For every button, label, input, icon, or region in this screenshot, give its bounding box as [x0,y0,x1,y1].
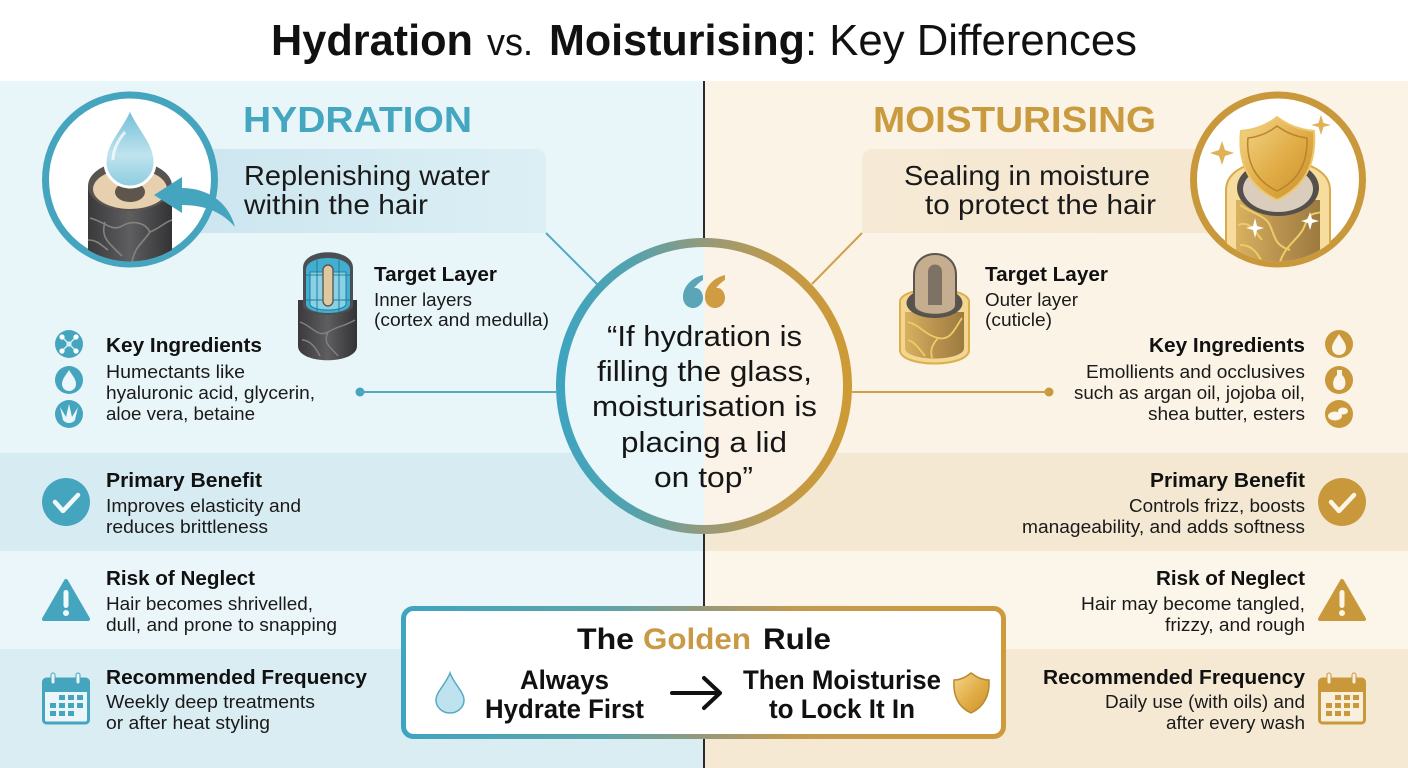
text: risk of neglect: Risk of Neglect [106,568,255,590]
text: primary benefit: reduces brittleness [106,516,268,537]
heading: the golden rule: The [577,623,634,656]
connector: ingredients to quote [852,388,1054,396]
text: key ingredients [1074,335,1305,424]
golden rule box [404,608,1004,736]
text: key ingredients: such as argan oil, jojoba oil, [1074,382,1305,403]
text: key ingredients: Key Ingredients [1149,335,1305,357]
heading: hydration: HYDRATION [243,99,472,140]
icon: oil bottle [1325,366,1353,394]
text: quote: on top” [654,462,753,494]
heading: the golden rule: Golden [643,623,751,656]
quote circle [560,242,848,530]
connector: callout to quote [546,233,597,284]
icon: calendar [1319,673,1365,723]
text: risk of neglect: Hair may become tangled, [1081,593,1305,614]
text: quote [592,321,817,494]
header background [0,0,1408,81]
text: quote: moisturisation is [592,391,817,423]
icon: water drop entering hair [46,95,235,270]
icon: target layer outer [900,254,969,364]
text: target layer: Target Layer [985,264,1108,286]
text: then moisturise: Then Moisturise [743,665,941,695]
text: risk of neglect: frizzy, and rough [1165,614,1305,635]
icon: warning [1320,581,1364,619]
icon: shield over hair [1194,95,1362,270]
text: risk of neglect [106,568,337,635]
callout: hydration definition: Replenishing water [244,160,490,191]
text: key ingredients: aloe vera, betaine [106,403,255,424]
icon: oil drop [1325,330,1353,358]
text: target layer [985,264,1108,330]
text: always hydrate first [485,665,644,724]
text: target layer: Inner layers [374,289,472,310]
icon: target layer inner [298,252,357,360]
heading: moisturising: MOISTURISING [873,99,1156,140]
text: always hydrate first: Always [520,665,609,695]
heading: the golden rule [577,623,831,656]
icon: small drop [436,673,464,713]
text: recommended frequency [106,667,368,733]
text: quote: “If hydration is [607,321,802,353]
text: recommended frequency: Recommended Frequency [106,667,368,689]
text: primary benefit: Controls frizz, boosts [1129,495,1305,516]
text: then moisturise: to Lock It In [769,694,915,724]
text: quote: placing a lid [621,427,787,459]
text: quote: filling the glass, [597,356,812,388]
text: then moisturise [743,665,941,724]
icon: ingredient aloe [55,400,83,428]
text: always hydrate first: Hydrate First [485,694,644,724]
title: : Key Differences [805,16,1137,65]
text: key ingredients: Key Ingredients [106,335,262,357]
connector: callout to quote [812,233,862,284]
callout: moisturising definition [862,149,1210,233]
icon: ingredient drop [55,366,83,394]
text: recommended frequency [1043,667,1306,733]
center divider [703,81,705,768]
text: target layer: (cuticle) [985,309,1052,330]
callout: moisturising definition: to protect the hair [925,189,1156,220]
text: risk of neglect [1081,568,1305,635]
icon: shea nuts [1325,400,1353,428]
text: risk of neglect: Hair becomes shrivelled, [106,593,313,614]
icon: check [42,478,90,526]
title: Moisturising [549,16,805,65]
text: key ingredients: hyaluronic acid, glycerin, [106,382,315,403]
text: recommended frequency: Daily use (with oils) and [1105,691,1305,712]
arrow [672,678,720,708]
text: primary benefit: Improves elasticity and [106,495,301,516]
title: Hydration [271,16,473,65]
icon: check [1318,478,1366,526]
panel: moisturising [704,81,1408,768]
text: target layer [374,264,549,330]
text: target layer: Outer layer [985,289,1078,310]
text: key ingredients [106,335,315,424]
callout: hydration definition: within the hair [243,189,428,220]
icon: calendar [43,673,89,723]
text: risk of neglect: Risk of Neglect [1156,568,1305,590]
text: target layer: Target Layer [374,264,497,286]
text: recommended frequency: Recommended Frequency [1043,667,1306,689]
text: recommended frequency: Weekly deep treatments [106,691,315,712]
text: key ingredients: Humectants like [106,361,245,382]
text: key ingredients: Emollients and occlusives [1086,361,1305,382]
text: primary benefit: Primary Benefit [106,470,262,492]
connector: ingredients to quote [356,388,556,396]
text: primary benefit [106,470,301,537]
callout: hydration definition [200,149,546,233]
text: recommended frequency: after every wash [1166,712,1305,733]
title: vs. [487,22,533,64]
text: primary benefit: Primary Benefit [1150,470,1305,492]
text: primary benefit: manageability, and adds softness [1022,516,1305,537]
title [271,16,1137,65]
icon: warning [44,581,88,619]
icon: small shield [954,673,989,713]
icon: ingredient molecule [55,330,83,358]
heading: the golden rule: Rule [763,623,831,656]
panel: hydration [0,81,704,768]
text: key ingredients: shea butter, esters [1148,403,1305,424]
text: primary benefit [1022,470,1305,537]
callout: moisturising definition: Sealing in moisture [904,160,1150,191]
text: recommended frequency: or after heat styling [106,712,270,733]
text: risk of neglect: dull, and prone to snapping [106,614,337,635]
text: target layer: (cortex and medulla) [374,309,549,330]
icon: quote marks [683,275,725,308]
